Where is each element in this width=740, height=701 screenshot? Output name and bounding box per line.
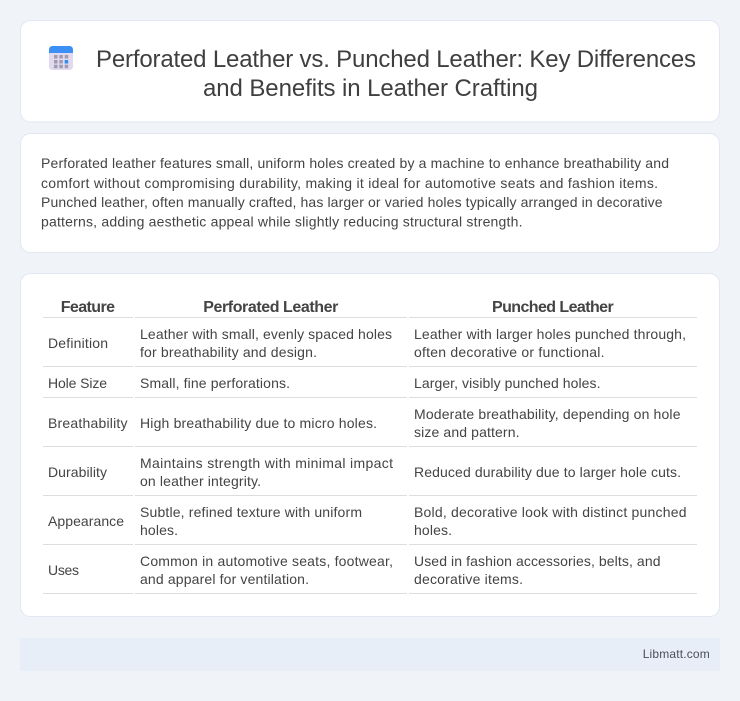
row: uses: and apparel for ventilation. [140,571,309,587]
row: appearance [48,504,686,538]
table rules [43,317,697,594]
row: definition: Leather with small, evenly spaced holes [140,326,392,342]
title: and Benefits in Leather Crafting [203,75,538,102]
intro text: comfort without compromising durability, making it ideal for automotive seats and fashion items. [41,175,658,191]
intro text: Perforated leather features small, uniform holes created by a machine to enhance breathability and [41,155,669,171]
row: appearance: holes. [414,522,452,538]
row: definition: for breathability and design. [140,344,317,360]
table header: Perforated Leather [203,299,338,316]
row: hole size: Larger, visibly punched holes. [414,375,600,391]
row: definition: often decorative or functional. [414,344,604,360]
row: definition: Leather with larger holes punched through, [414,326,686,342]
row: uses: Used in fashion accessories, belts, and [414,553,660,569]
row: uses [48,553,660,587]
row: breathability [48,406,681,440]
intro text: patterns, adding aesthetic appeal while slightly reducing structural strength. [41,214,522,230]
table header: Feature [61,299,115,316]
title: Perforated Leather vs. Punched Leather: Key Differences [96,46,696,73]
panel: comparison table [20,274,720,616]
panel: introduction [20,134,720,252]
row: definition: Definition [48,335,108,351]
row: durability: Reduced durability due to larger hole cuts. [414,464,681,480]
title [96,46,696,102]
row: durability [48,455,681,489]
row: durability: on leather integrity. [140,473,261,489]
row: breathability: Moderate breathability, depending on hole [414,406,681,422]
row: breathability: Breathability [48,415,128,431]
intro text [41,155,669,230]
row: appearance: Appearance [48,513,124,529]
row: uses: Common in automotive seats, footwear, [140,553,393,569]
row: hole size: Hole Size [48,375,107,391]
row: breathability: High breathability due to micro holes. [140,415,377,431]
row: uses: decorative items. [414,571,523,587]
row: definition [48,326,686,360]
row: uses: Uses [48,562,79,578]
table header [61,299,614,316]
footer [20,638,720,671]
table header: Punched Leather [492,299,614,316]
row: hole size [48,375,600,391]
footer credit: Libmatt.com [643,647,710,661]
row: hole size: Small, fine perforations. [140,375,290,391]
row: appearance: Bold, decorative look with distinct punched [414,504,686,520]
row: breathability: size and pattern. [414,424,520,440]
intro text: Punched leather, often manually crafted, has larger or varied holes typically arranged in decorative [41,194,663,210]
row: appearance: holes. [140,522,178,538]
icon: calendar [49,46,73,70]
row: durability: Durability [48,464,107,480]
row: durability: Maintains strength with minimal impact [140,455,393,471]
panel: title header [20,20,720,122]
row: appearance: Subtle, refined texture with uniform [140,504,362,520]
